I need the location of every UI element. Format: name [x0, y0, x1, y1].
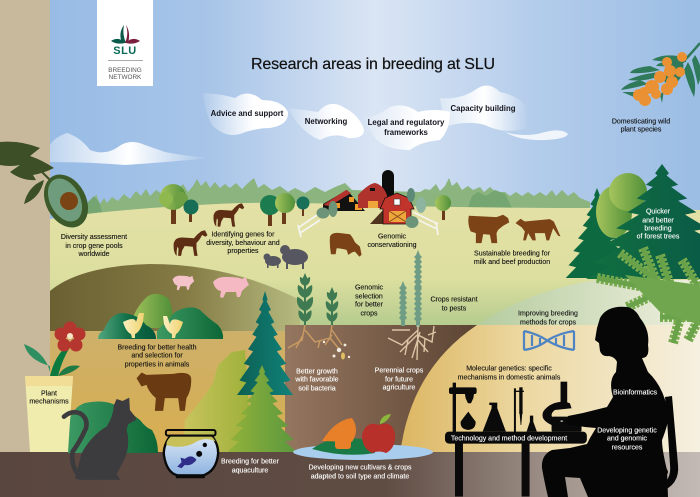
trees: round trees [159, 184, 451, 226]
label: sustainable breeding: milk and beef production [474, 259, 550, 266]
farm [298, 170, 438, 237]
plants: crops with roots [288, 273, 350, 360]
label: developing cultivars: adapted to soil type and climate [311, 474, 409, 480]
cloud: legal and regulatory [365, 105, 450, 150]
label: legal and regulatory frameworks: frameworks [384, 128, 429, 137]
label: breeding animals: and selection for [131, 352, 183, 360]
plants: perennial crops with roots [388, 250, 436, 360]
label: genomic selection: selection [355, 294, 383, 300]
label: diversity assessment: worldwide [77, 251, 110, 258]
tree: teal spruce [237, 291, 293, 395]
label: genomic conservationing: Genomic [378, 234, 406, 240]
label: plant mechanisms: Plant [41, 390, 57, 398]
label: developing cultivars: Developing new cultivars & crops [308, 464, 412, 472]
icon: plant pot [25, 376, 73, 452]
animal: pig small [173, 276, 194, 290]
label: improving methods: Improving breeding [518, 310, 578, 318]
label: perennial crops: for future [385, 376, 413, 384]
title: Research areas in breeding at SLU [251, 56, 495, 73]
logo panel [97, 0, 153, 86]
label: breeding animals: Breeding for better health [118, 344, 196, 352]
animal: sheep large [280, 245, 308, 269]
tree: olive hill [183, 350, 252, 452]
logo SLU: SLU [113, 45, 137, 57]
hill: brown [50, 264, 300, 332]
forest horizon [85, 178, 590, 225]
cloud: capacity building [440, 85, 528, 131]
cloud: networking [288, 104, 364, 140]
label: forest trees: of forest trees [637, 234, 680, 240]
field [50, 203, 700, 340]
label: better growth: with favorable [294, 376, 339, 384]
cloud: wisp right [505, 130, 568, 140]
ground: cream arc [400, 325, 700, 455]
label: domesticating: Domesticating wild [612, 118, 670, 126]
label: developing resources: resources [612, 444, 643, 452]
label: sustainable breeding: Sustainable breeding for [474, 250, 550, 258]
icon: plate with vegetables and apple [293, 414, 433, 460]
logo icon [111, 25, 140, 44]
label: crops resistant: Crops resistant [430, 296, 478, 304]
label: forest trees: breeding [644, 226, 672, 232]
animal: cow foreground [137, 373, 191, 411]
label: genomic selection: for better [355, 302, 384, 308]
animal: cow large field [468, 215, 509, 243]
label: genomic selection: Genomic [355, 284, 383, 292]
label: perennial crops: agriculture [383, 384, 415, 392]
hen right [163, 316, 183, 338]
icon: dna [524, 331, 574, 350]
label: bioinformatics: Bioinformatics [613, 390, 657, 396]
animal: pig large [213, 277, 249, 298]
ground: soil [285, 325, 480, 452]
icon: flower [24, 322, 86, 376]
label: better growth: soil bacteria [298, 386, 336, 392]
label: aquaculture: aquaculture [232, 468, 268, 474]
icon: avocado [0, 142, 97, 235]
lab equipment [445, 382, 587, 497]
label: advice and support: Advice and support [211, 109, 284, 118]
ground: tan [50, 331, 310, 456]
cloud: advice and support [203, 93, 288, 135]
sky [50, 0, 700, 225]
animal: horse upper [213, 203, 244, 227]
label: identifying genes: Identifying genes for [211, 232, 275, 238]
cloud: left decorative [50, 133, 210, 165]
label: networking: Networking [305, 117, 347, 126]
label: forest trees: and better [642, 218, 674, 224]
label: domesticating: plant species [621, 126, 662, 134]
animal: calf field [516, 219, 560, 240]
logo caption: NETWORK [109, 74, 142, 81]
label: developing resources: Developing genetic [597, 428, 657, 434]
floor [0, 452, 700, 497]
bush behind cat [68, 402, 158, 453]
label: crops resistant: to pests [442, 306, 467, 312]
label: plant mechanisms: mechanisms [29, 398, 69, 406]
ground: pale arc [477, 280, 700, 325]
icon: fishbowl [164, 430, 218, 478]
bushes and hens [98, 294, 223, 339]
logo caption: BREEDING [108, 67, 142, 74]
label: breeding animals: properties in animals [125, 362, 190, 368]
tree: green spruce [227, 365, 297, 452]
label: genomic conservationing: conservationing [367, 242, 417, 249]
animal: cow centre [330, 233, 362, 257]
label: genomic selection: crops [360, 310, 378, 318]
hen left [123, 313, 144, 338]
label: better growth: Better growth [296, 368, 338, 376]
label: diversity assessment: in crop gene pools [65, 243, 123, 250]
animal: sheep small [264, 254, 281, 268]
icon: sea buckthorn [621, 43, 700, 106]
label: identifying genes: diversity, behaviour and [206, 240, 280, 247]
animal: horse lower [174, 230, 207, 256]
label: molecular genetics: Molecular genetics: specific [466, 366, 552, 372]
label: improving methods: methods for crops [520, 320, 577, 326]
branch: conifer foreground [597, 248, 700, 343]
wall [0, 0, 50, 452]
label: aquaculture: Breeding for better [221, 458, 279, 466]
label: technology: Technology and method development [451, 436, 567, 442]
label: forest trees: Quicker [646, 208, 670, 216]
tree: forest right [566, 164, 700, 279]
forest: darker patch [85, 190, 512, 214]
label: molecular genetics: mechanisms in domestic animals [458, 374, 561, 382]
label: identifying genes: properties [227, 248, 259, 255]
label: capacity building: Capacity building [451, 104, 516, 113]
label: diversity assessment: Diversity assessment [61, 234, 127, 241]
silhouette: researcher [542, 307, 678, 497]
label: legal and regulatory frameworks: Legal and regulatory [368, 118, 444, 127]
label: developing resources: and genomic [607, 436, 648, 442]
label: perennial crops: Perennial crops [375, 368, 423, 374]
icon: cat [64, 398, 136, 480]
